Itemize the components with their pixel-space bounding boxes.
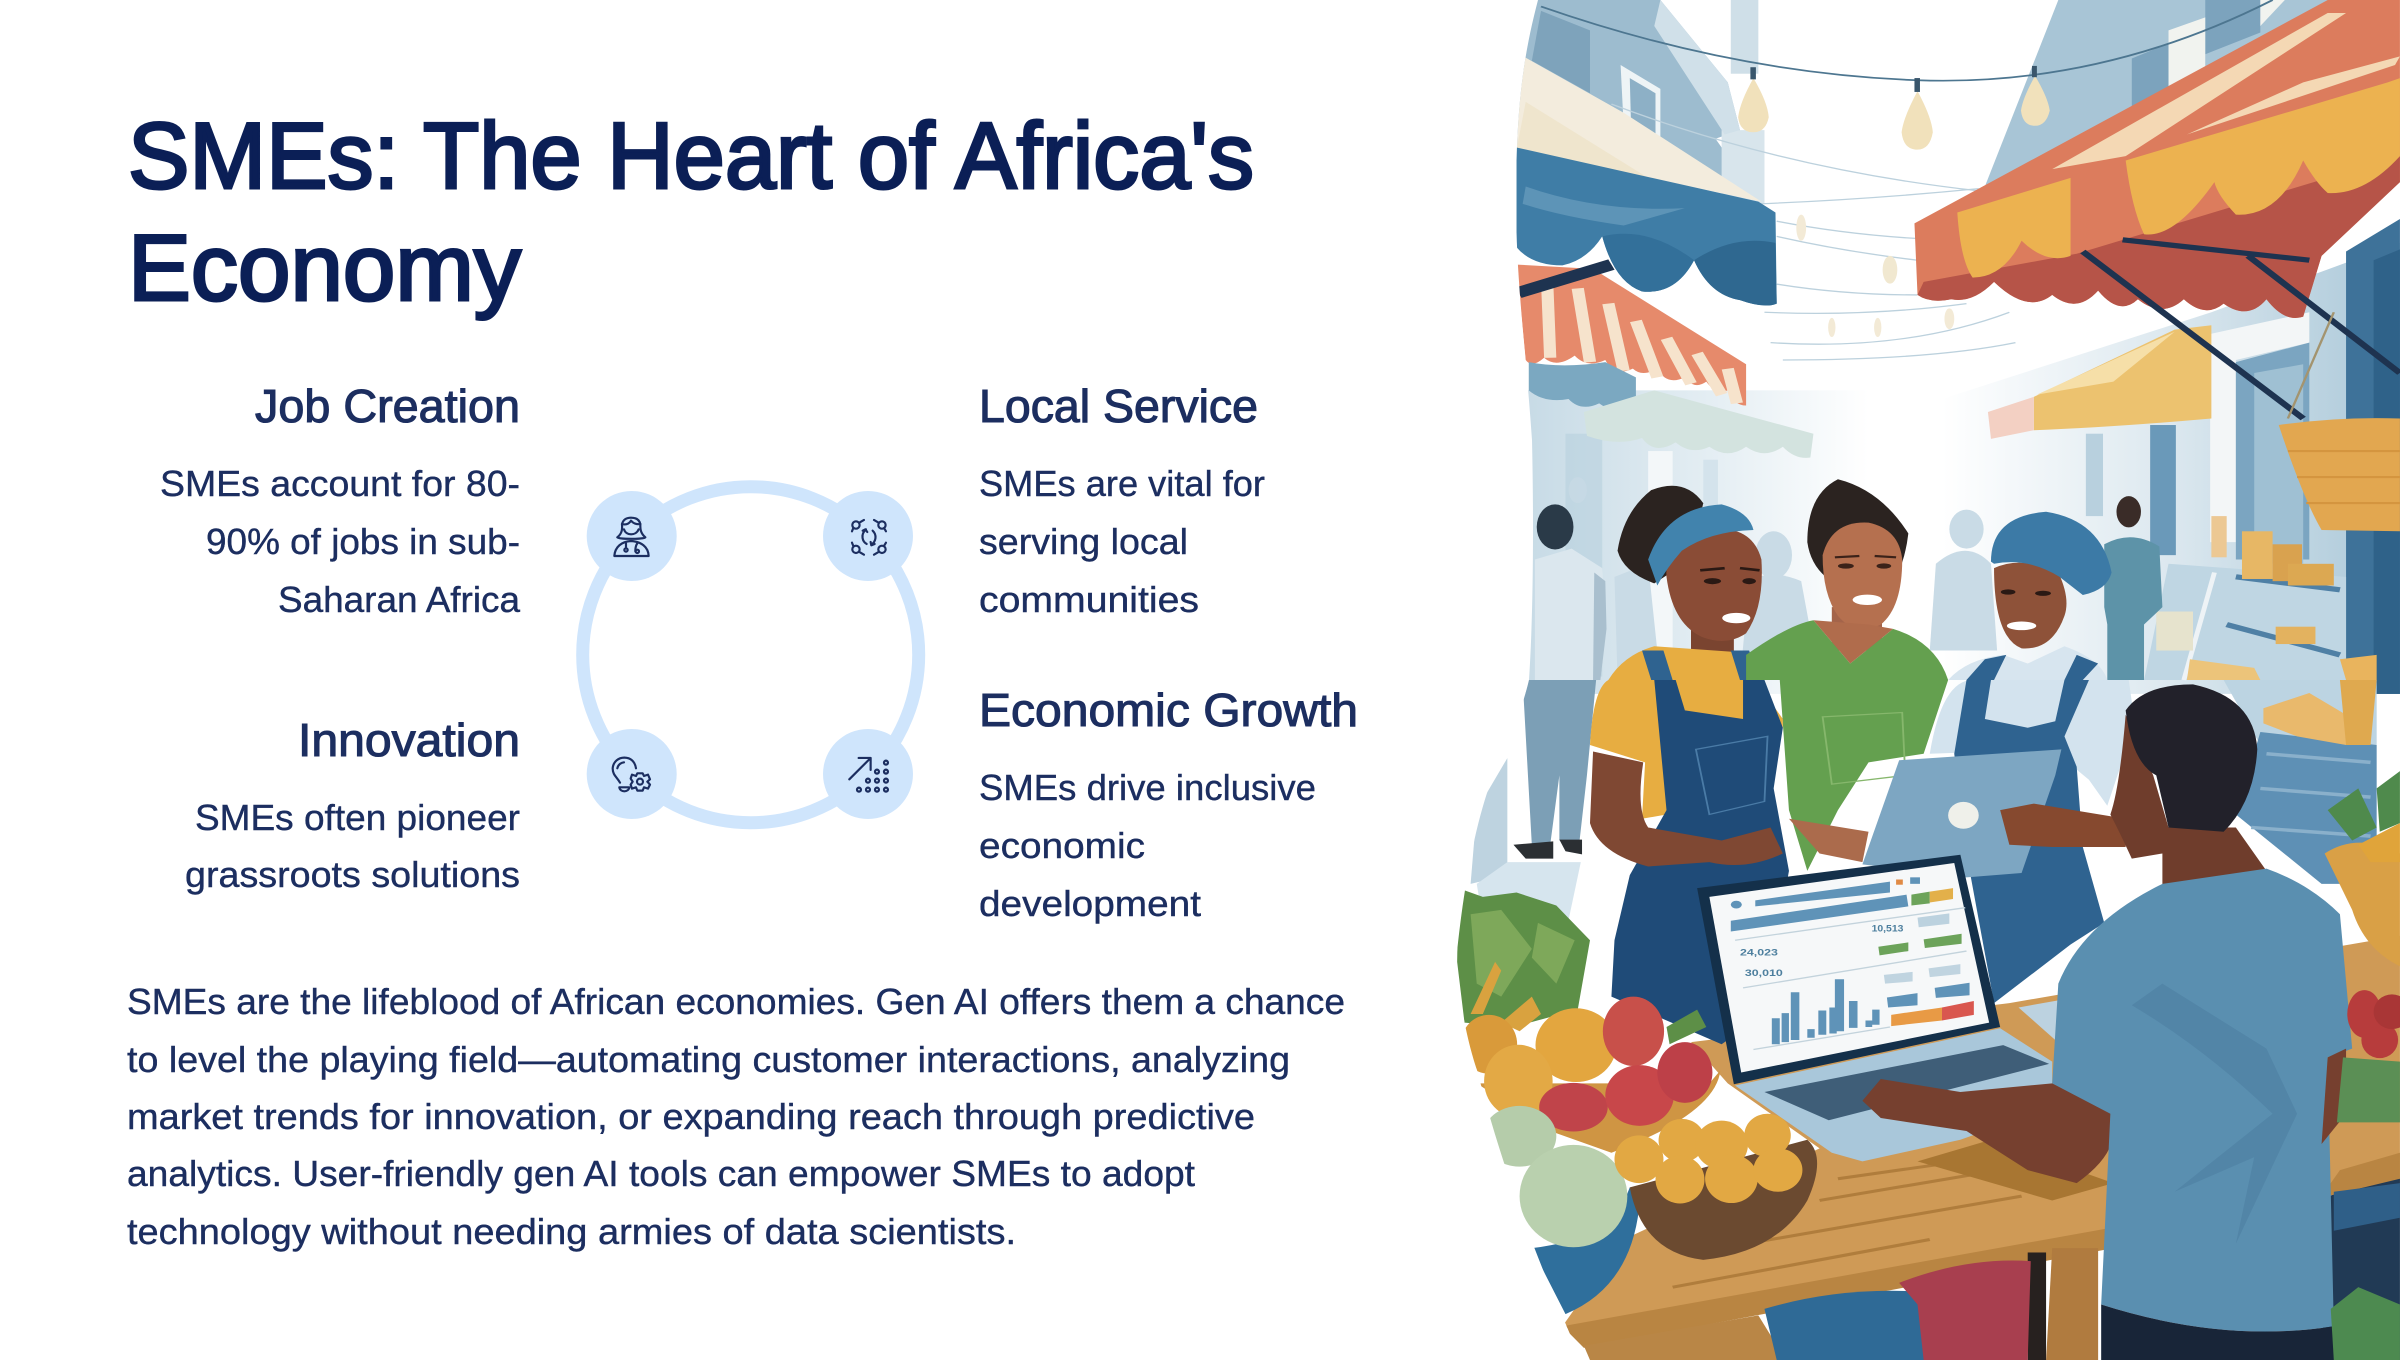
left upper building xyxy=(1517,0,1764,204)
pale awning xyxy=(1584,390,1813,458)
icon badge: local service xyxy=(823,491,913,581)
summary paragraph: to level the playing field—automating customer interactions, analyzing xyxy=(127,1039,1290,1080)
woman in blue headwrap: body xyxy=(1930,680,2135,1003)
text block: local service xyxy=(979,380,1265,620)
body: innovation xyxy=(185,797,520,895)
woman in green: body xyxy=(1780,680,1948,871)
text block: innovation xyxy=(185,714,520,895)
dashboard figures: 30,010 xyxy=(1745,968,1783,978)
back laptop and hand xyxy=(1862,749,2126,877)
left produce: greens, fruit and vegetables xyxy=(1457,888,1817,1314)
large coral and yellow awning xyxy=(1914,0,2400,419)
icon badge: job creation xyxy=(587,491,677,581)
title: Economy xyxy=(128,215,521,320)
background crowd xyxy=(1569,477,1997,680)
street background: buildings, awnings and lights xyxy=(1501,0,2400,694)
woman in blue headwrap: head xyxy=(1948,512,2112,680)
string lights xyxy=(1541,0,2273,360)
left pedestrian legs xyxy=(1470,680,1596,918)
icon badge: innovation xyxy=(587,729,677,819)
dashboard figures: 24,023 xyxy=(1740,947,1778,958)
body: job creation: Saharan Africa xyxy=(278,579,521,620)
table top xyxy=(1562,936,2400,1360)
summary paragraph: SMEs are the lifeblood of African economies. Gen AI offers them a chance xyxy=(127,981,1345,1022)
woman in green: head xyxy=(1746,479,1948,680)
dashboard figures xyxy=(1740,923,1904,978)
body: innovation: SMEs often pioneer xyxy=(195,797,520,838)
summary paragraph xyxy=(127,981,1345,1252)
yellow awning xyxy=(1988,325,2211,439)
shelves with goods xyxy=(2144,516,2377,680)
person walking away xyxy=(2104,496,2162,680)
hanging basket xyxy=(2279,312,2400,531)
body: job creation xyxy=(160,463,521,620)
summary paragraph: market trends for innovation, or expanding reach through predictive xyxy=(127,1096,1255,1137)
body: job creation: SMEs account for 80- xyxy=(160,463,520,504)
man at left xyxy=(1535,504,1607,680)
right produce xyxy=(2325,771,2400,1360)
right building xyxy=(1985,0,2340,186)
cycle diagram xyxy=(583,487,919,823)
body: economic growth: development xyxy=(979,883,1201,924)
foreground: people, laptop and produce xyxy=(1457,680,2400,1360)
body: economic growth: SMEs drive inclusive xyxy=(979,767,1316,808)
body: local service: SMEs are vital for xyxy=(979,463,1265,504)
striped orange awning xyxy=(1517,265,1746,412)
icon badge: economic growth xyxy=(823,729,913,819)
front laptop with dashboard xyxy=(1697,855,2052,1161)
heading: local service: Local Service xyxy=(979,380,1258,432)
heading: innovation: Innovation xyxy=(298,714,520,766)
woman with blue headband: body xyxy=(1590,680,1869,1044)
ring xyxy=(583,487,919,823)
body: local service: serving local xyxy=(979,521,1188,562)
right street wall xyxy=(1995,219,2400,694)
illustration: market scene with entrepreneurs and laptop xyxy=(1440,0,2400,1360)
body: job creation: 90% of jobs in sub- xyxy=(206,521,520,562)
text block: job creation xyxy=(160,380,521,620)
title xyxy=(128,103,1254,320)
summary paragraph: technology without needing armies of data scientists. xyxy=(127,1211,1016,1252)
buckets under table xyxy=(1764,1261,2031,1360)
left lower haze xyxy=(1525,390,1820,694)
heading: job creation: Job Creation xyxy=(255,380,520,432)
body: economic growth: economic xyxy=(979,825,1145,866)
man in blue shirt xyxy=(1862,684,2352,1360)
text block: economic growth xyxy=(979,684,1358,924)
title: SMEs: The Heart of Africa's xyxy=(128,103,1254,208)
body: local service: communities xyxy=(979,579,1199,620)
woman with blue headband: head xyxy=(1608,486,1777,680)
summary paragraph: analytics. User-friendly gen AI tools can empower SMEs to adopt xyxy=(127,1153,1195,1194)
dashboard figures: 10,513 xyxy=(1872,923,1904,934)
cream awning and blue awning xyxy=(1517,54,1777,306)
heading: economic growth: Economic Growth xyxy=(979,684,1358,736)
body: economic growth xyxy=(979,767,1316,924)
body: local service xyxy=(979,463,1265,620)
body: innovation: grassroots solutions xyxy=(185,854,520,895)
right blue counter xyxy=(2224,680,2377,884)
